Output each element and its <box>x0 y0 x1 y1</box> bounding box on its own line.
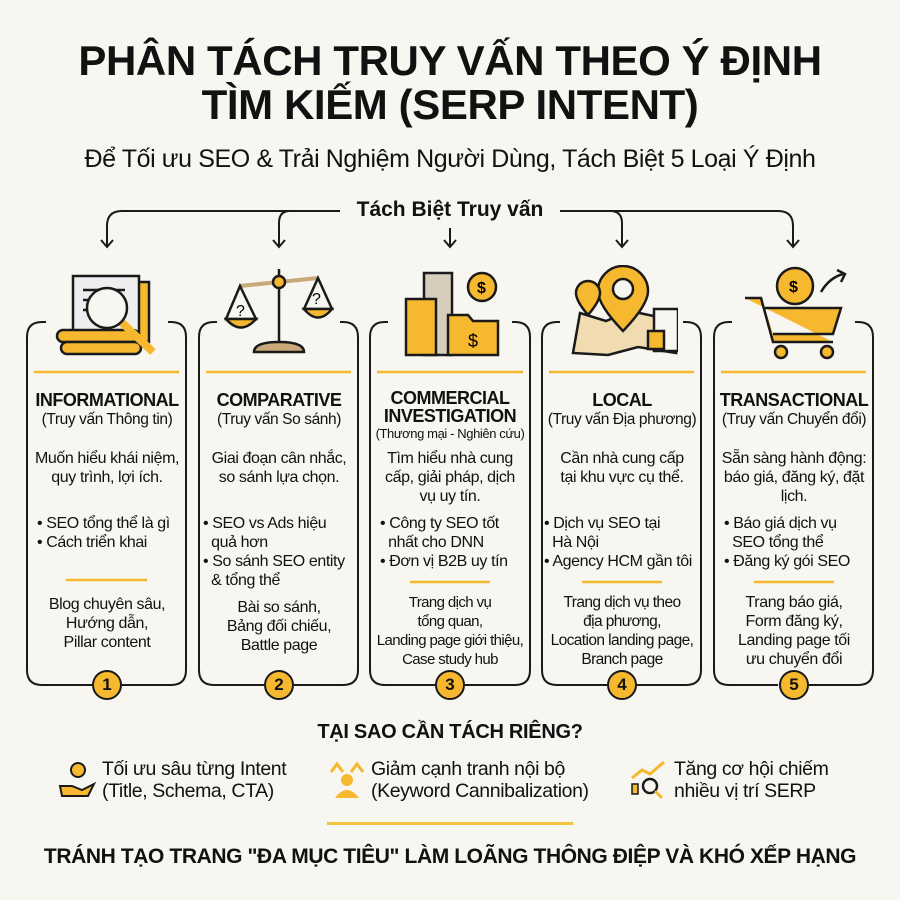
title <box>78 37 822 128</box>
panel: transactional: Trang báo giá, <box>746 594 842 611</box>
panel: local: địa phương, <box>583 613 661 630</box>
panel: local: tại khu vực cụ thể. <box>560 469 684 486</box>
icon: scale: ? <box>312 291 321 308</box>
benefit 3 <box>631 758 828 802</box>
panel: comparative <box>203 390 346 700</box>
panel: commercial investigation: Trang dịch vụ <box>409 594 491 611</box>
title: PHÂN TÁCH TRUY VẤN THEO Ý ĐỊNH <box>78 37 822 84</box>
panel: comparative: • So sánh SEO entity <box>203 553 345 570</box>
panel: commercial investigation: Tìm hiểu nhà cung <box>387 450 513 467</box>
icon: cart: $ <box>789 279 798 296</box>
panel: local: LOCAL <box>592 390 652 410</box>
panel: comparative: • SEO vs Ads hiệu <box>203 515 326 532</box>
icon: buildings <box>404 272 500 356</box>
panel: informational: 1 <box>102 675 112 694</box>
icon: chart magnifier <box>631 760 665 799</box>
panel: commercial investigation: cấp, giải pháp, dịch <box>385 469 515 486</box>
panel: commercial investigation: (Thương mại - Nghiên cứu) <box>376 426 524 441</box>
panel: informational <box>35 390 179 700</box>
panel: informational: INFORMATIONAL <box>35 390 179 410</box>
icon: gear hand <box>58 762 96 797</box>
panel: transactional: SEO tổng thể <box>732 534 823 551</box>
panel: local: (Truy vấn Địa phương) <box>548 411 696 428</box>
icon: map pin <box>572 265 678 356</box>
heading: why separate: TẠI SAO CẦN TÁCH RIÊNG? <box>317 721 583 743</box>
panel: commercial investigation: 3 <box>445 675 455 694</box>
benefit 2: Giảm cạnh tranh nội bộ <box>371 758 565 780</box>
title: TÌM KIẾM (SERP INTENT) <box>202 81 698 128</box>
panel: commercial investigation: COMMERCIAL <box>390 388 510 408</box>
panel: commercial investigation: • Công ty SEO tốt <box>380 515 499 532</box>
panel: commercial investigation: • Đơn vị B2B uy tín <box>380 553 508 570</box>
subtitle: Để Tối ưu SEO & Trải Nghiệm Người Dùng, Tách Biệt 5 Loại Ý Định <box>84 145 816 173</box>
panel: informational: quy trình, lợi ích. <box>51 469 163 486</box>
icon: people <box>330 762 364 798</box>
panel: transactional: • Đăng ký gói SEO <box>724 553 850 570</box>
panel: commercial investigation: vụ uy tín. <box>420 488 480 505</box>
panel: transactional: TRANSACTIONAL <box>720 390 868 410</box>
benefit 3: nhiều vị trí SERP <box>674 780 816 802</box>
panel: local <box>544 390 696 700</box>
panel: local: Hà Nội <box>552 534 599 551</box>
panel: transactional: lịch. <box>781 488 807 505</box>
panel: commercial investigation: tổng quan, <box>418 613 482 630</box>
panel: transactional: ưu chuyển đổi <box>746 651 842 668</box>
footer message: TRÁNH TẠO TRANG "ĐA MỤC TIÊU" LÀM LOÃNG THÔNG ĐIỆP VÀ KHÓ XẾP HẠNG <box>44 845 856 868</box>
panel: comparative: Bài so sánh, <box>237 599 321 616</box>
panel: transactional: 5 <box>789 675 799 694</box>
panel: comparative: Bảng đối chiếu, <box>227 618 331 635</box>
icon: buildings: $ <box>468 331 478 351</box>
panel: informational: (Truy vấn Thông tin) <box>42 411 172 428</box>
panel: commercial investigation: Landing page giới thiệu, <box>377 632 523 649</box>
panel: comparative: Giai đoạn cân nhắc, <box>212 450 346 467</box>
panel: informational: Blog chuyên sâu, <box>49 596 165 613</box>
benefit 2: (Keyword Cannibalization) <box>371 780 589 802</box>
panel: local: Trang dịch vụ theo <box>563 594 680 611</box>
panel: transactional: báo giá, đăng ký, đặt <box>724 469 864 486</box>
panel: local: Location landing page, <box>551 632 693 649</box>
connector arrows <box>100 210 800 248</box>
benefit 1: (Title, Schema, CTA) <box>102 780 274 802</box>
panel: local: 4 <box>617 675 627 694</box>
panel: informational: • Cách triển khai <box>37 534 147 551</box>
panel: local: • Dịch vụ SEO tại <box>544 515 660 532</box>
icon: cart <box>745 266 847 360</box>
divider <box>327 822 573 825</box>
icon: buildings: $ <box>477 280 486 297</box>
benefit 1: Tối ưu sâu từng Intent <box>102 758 286 780</box>
connector label: Tách Biệt Truy vấn <box>357 198 543 221</box>
panel: comparative: Battle page <box>241 637 317 654</box>
panel: informational: Muốn hiểu khái niệm, <box>35 450 179 467</box>
panel: informational: Hướng dẫn, <box>66 615 148 632</box>
panel: informational: • SEO tổng thể là gì <box>37 515 170 532</box>
panel: transactional: Form đăng ký, <box>745 613 843 630</box>
panel: comparative: 2 <box>274 675 284 694</box>
benefit 2 <box>330 758 589 802</box>
panel: local: Cần nhà cung cấp <box>560 450 684 467</box>
benefit 1 <box>58 758 287 802</box>
panel: comparative: & tổng thể <box>211 572 280 589</box>
panel: commercial investigation: nhất cho DNN <box>388 534 484 551</box>
panel: transactional: • Báo giá dịch vụ <box>724 515 837 532</box>
panel: transactional: Landing page tối <box>738 632 850 649</box>
panel: comparative: (Truy vấn So sánh) <box>217 411 341 428</box>
panel: commercial investigation: Case study hub <box>402 651 498 668</box>
icon: scale <box>224 269 334 354</box>
icon: scale: ? <box>236 303 245 320</box>
panel: comparative: so sánh lựa chọn. <box>219 469 339 486</box>
panel: informational: Pillar content <box>64 634 150 651</box>
benefit 3: Tăng cơ hội chiếm <box>674 758 828 780</box>
icon: document magnifier <box>56 274 156 356</box>
panel: commercial investigation: INVESTIGATION <box>384 406 516 426</box>
card outlines <box>26 321 874 686</box>
panel: local: Branch page <box>581 651 663 668</box>
panel: transactional: Sẵn sàng hành động: <box>722 450 866 467</box>
panel: transactional: (Truy vấn Chuyển đổi) <box>722 411 866 428</box>
panel: comparative: COMPARATIVE <box>217 390 341 410</box>
panel: commercial investigation <box>376 388 524 700</box>
panel: local: • Agency HCM gần tôi <box>544 553 692 570</box>
panel: transactional <box>720 390 868 700</box>
panel: comparative: quả hơn <box>211 534 268 551</box>
